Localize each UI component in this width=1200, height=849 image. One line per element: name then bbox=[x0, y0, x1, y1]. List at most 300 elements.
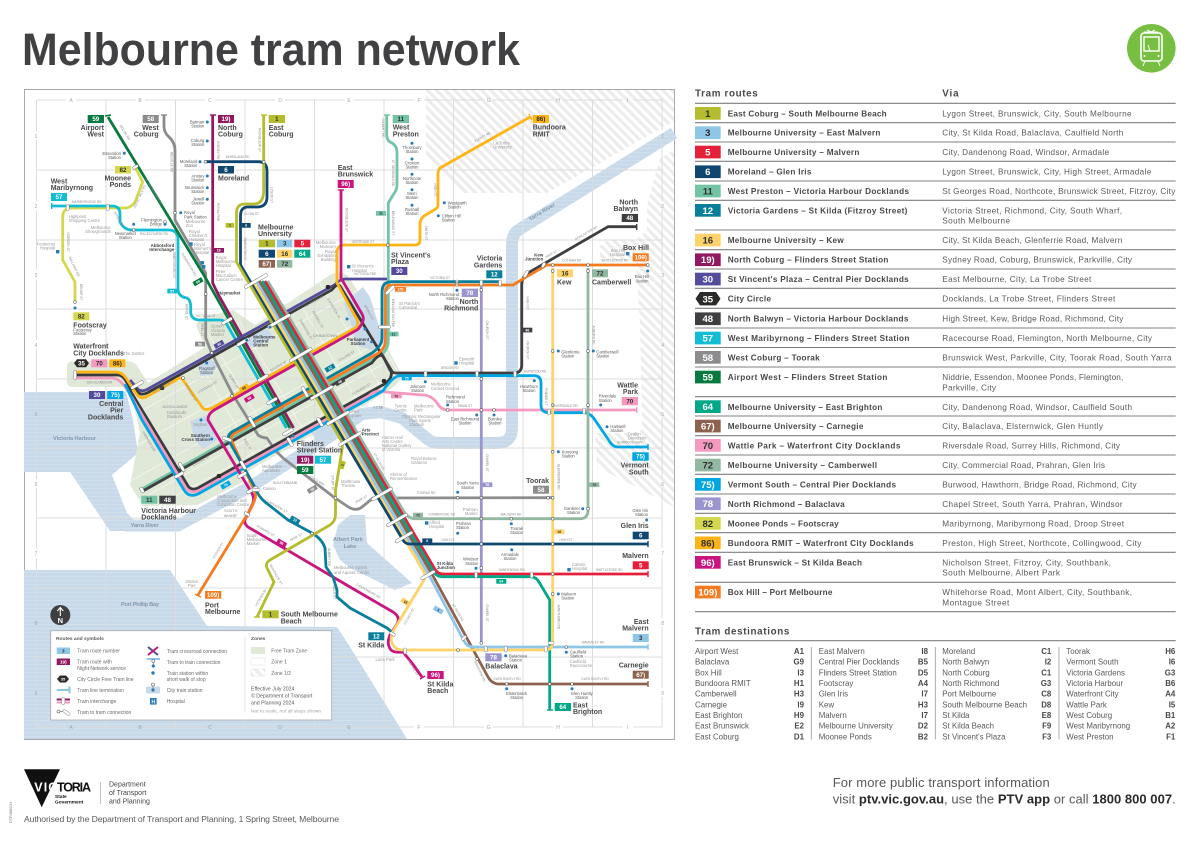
panel: tram destinations bbox=[695, 626, 1176, 741]
water labels bbox=[53, 202, 557, 608]
street names: ST KILDA RD bbox=[451, 603, 465, 623]
destination label: Malvern: Malvern bbox=[622, 553, 649, 560]
station names: Brunswick bbox=[185, 185, 205, 190]
destination label: Camberwell: 72 bbox=[597, 270, 604, 278]
station names: Station bbox=[191, 189, 205, 194]
row: route 72: City, Commercial Road, Prahran, Glen Iris bbox=[942, 461, 1105, 470]
grid references: B bbox=[138, 725, 142, 731]
grid references: H bbox=[556, 725, 560, 731]
street names: CHAPEL ST bbox=[485, 454, 489, 472]
destination label: St Vincent's Plaza: 30 bbox=[396, 268, 403, 275]
street names: BOURKE ST bbox=[270, 360, 288, 372]
panel: tram routes table bbox=[695, 89, 1176, 612]
landmarks: MacCallum bbox=[216, 273, 237, 278]
grid references: 2 bbox=[661, 204, 664, 210]
destination label: St Vincent's Plaza: Plaza bbox=[391, 259, 409, 266]
destinations column 1: Box Hill bbox=[695, 668, 722, 677]
street names: HIGH ST bbox=[526, 297, 530, 310]
destinations column 4: G3 bbox=[1165, 668, 1176, 677]
small inline route markers: 48 bbox=[525, 328, 529, 332]
row: route 1: 1 bbox=[705, 109, 711, 120]
landmarks: Market bbox=[465, 511, 479, 516]
station names: Anstey bbox=[191, 174, 205, 178]
row: route 57: Racecourse Road, Flemington, North Melbourne, City bbox=[942, 334, 1153, 343]
landmarks: Box Hill bbox=[611, 248, 625, 253]
small inline route markers: 86 bbox=[241, 386, 247, 391]
street names: ACLAND ST bbox=[407, 659, 419, 676]
station names: Westgarth bbox=[448, 200, 467, 206]
row: route 11 bbox=[695, 185, 1176, 198]
destination label: East Brighton bbox=[555, 702, 602, 716]
street names: LA TROBE ST bbox=[153, 380, 172, 394]
street names: ELIZABETH ST bbox=[249, 349, 263, 370]
street names: PARK ST bbox=[289, 532, 303, 542]
destinations column 4: B6 bbox=[1165, 679, 1176, 688]
route 72 bbox=[268, 268, 588, 519]
row: route 48: 48 bbox=[702, 314, 714, 325]
footer: authorisation note: Authorised by the Department of Transport and Planning, 1 Spring Street, Melbourne bbox=[24, 814, 339, 824]
row: route 58 bbox=[695, 351, 1172, 364]
street names: HIGH ST bbox=[442, 538, 455, 542]
destination label: Melbourne University: 64 bbox=[299, 251, 306, 258]
legend: city train station: City train station bbox=[167, 688, 203, 694]
row: route 30 bbox=[695, 273, 1092, 286]
station names: Royal bbox=[184, 210, 195, 215]
landmarks: Melbourne bbox=[262, 464, 282, 469]
route 58 bbox=[164, 115, 553, 509]
grid references: 8 bbox=[35, 621, 38, 627]
street names: BRIDGE RD bbox=[441, 366, 460, 370]
logo: Victoria State Government: Government bbox=[55, 800, 84, 806]
destinations column 3: I2 bbox=[1045, 658, 1052, 667]
station names: Hartwell bbox=[610, 424, 625, 429]
destination label: Carnegie bbox=[619, 663, 649, 679]
landmarks: Docklands bbox=[167, 410, 186, 415]
row: route 58: Brunswick West, Parkville, City, Toorak Road, South Yarra bbox=[942, 354, 1172, 362]
landmarks: Park bbox=[414, 408, 424, 412]
street names: PARK ST bbox=[355, 494, 368, 504]
small inline route markers: 96 bbox=[279, 541, 284, 546]
route 11 bbox=[142, 115, 397, 489]
row: route 6: 6 bbox=[705, 167, 710, 178]
grid references: G bbox=[487, 98, 491, 104]
destination label: North Coburg bbox=[218, 115, 243, 139]
destinations column 4: West Coburg bbox=[1066, 711, 1112, 720]
row: route 75 bbox=[695, 478, 1138, 491]
landmarks: Malthouse bbox=[341, 479, 361, 484]
destination label: Camberwell bbox=[592, 269, 631, 286]
destination label: West Preston bbox=[393, 115, 419, 138]
legend: train station within walk bbox=[151, 671, 208, 683]
destination label: West Coburg: West bbox=[142, 125, 159, 132]
row: route 82: Moonee Ponds – Footscray bbox=[728, 520, 839, 528]
route 82 bbox=[63, 167, 143, 302]
landmarks: Hospital bbox=[194, 250, 209, 255]
small inline route markers: 96 bbox=[247, 396, 252, 401]
station names: Station bbox=[575, 695, 589, 700]
small inline route markers: 1 bbox=[229, 224, 231, 228]
row: route 109: Whitehorse Road, Mont Albert, City, Southbank, bbox=[942, 588, 1132, 597]
station names: Station bbox=[561, 354, 575, 358]
route 75 bbox=[125, 376, 648, 495]
landmarks: Luna Park bbox=[375, 657, 395, 662]
grid references: H bbox=[556, 98, 560, 104]
station names: Station bbox=[108, 155, 122, 160]
street names: MONTAGUE ST bbox=[268, 563, 283, 586]
row: route 19 bbox=[695, 253, 1133, 266]
destination label: Central Pier Docklands: 75) bbox=[111, 392, 120, 399]
landmarks: University bbox=[628, 436, 647, 440]
row: route 59 bbox=[695, 371, 1123, 392]
destination label: East Brighton: Brighton bbox=[573, 709, 602, 716]
street names: SPRING ST bbox=[363, 304, 375, 321]
grid references: 5 bbox=[661, 412, 664, 418]
destination label: Kew bbox=[557, 269, 573, 286]
destination label: Malvern bbox=[622, 553, 649, 570]
landmarks: Pier bbox=[188, 583, 196, 588]
destination label: Wattle Park: 70 bbox=[626, 398, 634, 405]
row: route 109: 109) bbox=[698, 588, 717, 598]
destination label: Melbourne University: 67) bbox=[262, 261, 271, 268]
row: route 67: Melbourne University – Carnegie bbox=[728, 422, 864, 431]
legend: night network route: 19) bbox=[60, 660, 67, 664]
grid lines bbox=[36, 100, 662, 727]
landmarks: Melbourne bbox=[414, 404, 434, 408]
row: route 1: East Coburg – South Melbourne Beach bbox=[728, 109, 887, 118]
legend: train station within walk: Train station within bbox=[167, 671, 208, 677]
destinations column 1: Camberwell bbox=[695, 690, 737, 699]
station names: Station bbox=[405, 180, 419, 185]
footer: contact information bbox=[833, 775, 1176, 806]
station names: Melbourne bbox=[253, 334, 276, 340]
destination label: Victoria Harbour Docklands: Docklands bbox=[141, 515, 177, 522]
landmarks: Cathedral bbox=[399, 305, 417, 310]
destinations column 3: F3 bbox=[1042, 732, 1052, 741]
destination label: Kew: 16 bbox=[562, 270, 569, 278]
destinations column 1: East Brighton bbox=[695, 711, 742, 720]
row: route 12: 12 bbox=[702, 206, 713, 217]
small inline route markers: 1 bbox=[340, 463, 345, 467]
destination label: St Kilda bbox=[358, 632, 384, 649]
street names: CHURCH ST bbox=[526, 341, 530, 359]
station names: Station bbox=[405, 211, 419, 216]
small inline route markers bbox=[167, 211, 599, 615]
station names: Station bbox=[405, 149, 419, 154]
destination label: West Coburg bbox=[134, 115, 159, 139]
station names: Balaclava bbox=[509, 654, 528, 658]
destination label: Central Pier Docklands: Docklands bbox=[88, 414, 123, 421]
landmarks: SkyBus bbox=[193, 422, 207, 427]
landmarks: Stadium bbox=[167, 414, 183, 419]
destination label: Victoria Harbour Docklands: 11 bbox=[146, 497, 153, 504]
logo: Victoria State Government: Department bbox=[109, 782, 146, 789]
destination label: East Coburg bbox=[269, 115, 294, 139]
destination label: West Preston: West bbox=[393, 125, 410, 132]
street names: GORDON ST bbox=[66, 232, 70, 252]
street names: SMITH ST bbox=[424, 226, 428, 240]
destination label: East Brunswick: East bbox=[338, 165, 353, 172]
row: route 6 bbox=[695, 165, 1152, 178]
landmarks: Melbourne bbox=[91, 225, 111, 230]
small inline route markers: 109 bbox=[398, 288, 404, 292]
station names: Station bbox=[191, 142, 205, 147]
destination label: Box Hill: Box Hill bbox=[623, 245, 649, 252]
row: route 96: 96) bbox=[701, 558, 715, 569]
street names: BURWOOD HWY bbox=[617, 441, 644, 445]
destination label: Moonee Ponds: Moonee bbox=[105, 175, 131, 182]
destinations column 2: Footscray bbox=[819, 679, 853, 688]
landmarks: La Trobe bbox=[493, 140, 511, 146]
landmarks: Hospital bbox=[352, 268, 367, 273]
destination label: East Malvern bbox=[622, 619, 649, 642]
panel: legend bbox=[51, 631, 332, 720]
city street grid bbox=[131, 280, 402, 506]
landmarks: Melbourne bbox=[216, 259, 236, 264]
grid references: 3 bbox=[661, 273, 664, 279]
grid references: E bbox=[347, 98, 351, 104]
station names: Batman bbox=[190, 120, 205, 124]
destinations column 4: F1 bbox=[1166, 732, 1176, 741]
destination label: Waterfront City Docklands: 86) bbox=[113, 360, 122, 368]
destination label: St Kilda: St Kilda bbox=[358, 642, 384, 649]
route 30 bbox=[130, 279, 387, 391]
destination label: St Vincent's Plaza bbox=[391, 252, 431, 275]
row: route 35: City Circle bbox=[728, 295, 771, 304]
heading: via: Via bbox=[942, 89, 959, 100]
destination label: West Maribyrnong: Maribyrnong bbox=[51, 185, 93, 192]
destination label: Waterfront City Docklands: Waterfront bbox=[73, 344, 109, 351]
destination label: Waterfront City Docklands: 70 bbox=[96, 360, 103, 368]
interchange bars bbox=[66, 164, 585, 654]
destination label: Airport West: 59 bbox=[92, 116, 100, 123]
street names: POWER ST bbox=[544, 388, 548, 405]
destination label: Carnegie: 67) bbox=[636, 672, 645, 679]
legend: tram to train connection: Tram to train connection bbox=[167, 660, 221, 666]
station names: Jolimont bbox=[410, 384, 426, 389]
destinations column 3 bbox=[942, 647, 1052, 741]
icon: north arrow bbox=[50, 605, 70, 625]
row: route 78: Chapel Street, South Yarra, Prahran, Windsor bbox=[942, 500, 1123, 509]
destination label: Airport West: Airport bbox=[81, 125, 105, 132]
destinations column 3: C1 bbox=[1041, 668, 1052, 677]
street names: GLENFERRIE RD bbox=[556, 464, 560, 490]
destinations column 3: G3 bbox=[1041, 679, 1052, 688]
street names: MELVILLE RD bbox=[170, 152, 174, 173]
destinations column 1: Airport West bbox=[695, 647, 739, 656]
small inline route markers: 19 bbox=[217, 249, 221, 253]
destinations column 2: Flinders Street Station bbox=[819, 668, 897, 677]
landmarks: Centre bbox=[394, 408, 407, 412]
destination label: Flinders Street Station bbox=[297, 441, 342, 474]
destinations column 2: B5 bbox=[918, 658, 929, 667]
destination label: Flinders Street Station: 19) bbox=[301, 457, 310, 464]
station names: Junction bbox=[437, 565, 455, 570]
destinations column 1: I9 bbox=[797, 700, 805, 709]
logo: Victoria State Government: of Transport bbox=[109, 790, 146, 797]
street names: VICTORIA PDE bbox=[354, 272, 376, 276]
street names: WHARF bbox=[224, 514, 238, 518]
destination label: North Balwyn bbox=[613, 199, 638, 222]
landmarks: Hospital bbox=[40, 246, 55, 250]
destination label: North Coburg: North bbox=[218, 125, 237, 132]
station names: Station bbox=[561, 596, 575, 600]
row: route 64: Melbourne University – East Brighton bbox=[728, 403, 882, 412]
destination label: East Brighton: East bbox=[573, 702, 588, 709]
grid references: D bbox=[278, 98, 282, 104]
street names: GLEN HUNTLY RD bbox=[493, 677, 521, 681]
logo: Victoria State Government: TORIA bbox=[57, 780, 91, 794]
street names bbox=[66, 118, 644, 683]
route 86 bbox=[75, 117, 530, 410]
street names: BURWOOD RD bbox=[524, 370, 547, 374]
row: route 48: High Street, Kew, Bridge Road, Richmond, City bbox=[942, 315, 1124, 324]
grid references: C bbox=[208, 98, 212, 104]
small inline route markers: 6 bbox=[426, 539, 428, 543]
destinations column 1 bbox=[695, 647, 805, 741]
grid references: F bbox=[417, 98, 421, 104]
destinations column 2: Moonee Ponds bbox=[819, 732, 872, 741]
row: route 70: Riversdale Road, Surrey Hills, Richmond, City bbox=[942, 442, 1121, 450]
street names: CHURCH ST bbox=[485, 321, 489, 339]
destinations column 2: Kew bbox=[819, 700, 834, 709]
landmarks: ACMI bbox=[373, 405, 383, 410]
station names: Station bbox=[411, 388, 425, 393]
row: route 57: West Maribyrnong – Flinders Street Station bbox=[728, 334, 909, 343]
street names: ASCOT VALE RD bbox=[133, 184, 147, 209]
row: route 5 bbox=[695, 146, 1109, 158]
grid references: 2 bbox=[35, 204, 38, 210]
row: route 70: Wattle Park – Waterfront City Docklands bbox=[728, 442, 901, 450]
station names: Station bbox=[405, 195, 419, 200]
row: route 78: North Richmond – Balaclava bbox=[728, 500, 845, 509]
legend: tram to tram connection bbox=[57, 709, 132, 716]
landmarks: Museum bbox=[320, 244, 336, 249]
destinations column 4: Victoria Gardens bbox=[1066, 668, 1125, 677]
landmarks: Epworth bbox=[459, 356, 475, 362]
station names: Station bbox=[446, 296, 460, 301]
title: Melbourne tram network bbox=[22, 24, 521, 75]
water labels: Victoria Harbour bbox=[53, 436, 97, 442]
landmarks: Deakin bbox=[628, 432, 641, 436]
destinations column 1: East Brunswick bbox=[695, 722, 749, 731]
street names: LONSDALE ST bbox=[197, 380, 218, 394]
landmarks: Shrine of bbox=[390, 472, 408, 477]
destination label: Wattle Park bbox=[617, 382, 638, 405]
street names: STURT ST bbox=[331, 475, 335, 491]
route 35 City Circle Flinders and Docklands bbox=[75, 371, 391, 489]
street names: ROYAL PDE bbox=[216, 203, 220, 221]
grid references: 7 bbox=[661, 551, 664, 557]
station names: Station bbox=[465, 561, 479, 566]
destination label: North Richmond: North bbox=[460, 299, 478, 306]
street names: RIVERSDALE RD bbox=[552, 404, 579, 408]
station names: Burnley bbox=[488, 416, 503, 422]
station names: Station bbox=[191, 124, 205, 128]
station names: Station bbox=[351, 341, 366, 346]
station names: Precinct bbox=[362, 432, 380, 436]
legend: tram route number: 3 bbox=[62, 648, 65, 654]
small inline route markers: 78 bbox=[485, 483, 489, 487]
destination label: Vermont South: South bbox=[629, 469, 649, 476]
legend: hospital: H bbox=[151, 699, 155, 705]
destination label: St Kilda Beach bbox=[427, 671, 453, 695]
logo: Victoria State Government: and Planning bbox=[109, 798, 150, 805]
destination label: Glen Iris: 6 bbox=[639, 533, 643, 540]
destination label: Flinders Street Station: 57 bbox=[320, 457, 327, 464]
free tram zone bbox=[67, 273, 403, 506]
row: route 5: 5 bbox=[705, 148, 711, 158]
destinations column 4: H6 bbox=[1165, 647, 1176, 656]
station names: Abbotsford bbox=[151, 243, 175, 248]
destination label: Bundoora RMIT bbox=[533, 115, 566, 138]
station names: Gardiner bbox=[564, 506, 581, 511]
destinations column 3: Moreland bbox=[942, 647, 975, 656]
destinations column 3: F9 bbox=[1042, 722, 1052, 731]
legend: city circle: 35 bbox=[61, 676, 66, 681]
row: route 72: 72 bbox=[702, 460, 713, 472]
station names: Junction bbox=[525, 256, 544, 262]
destinations column 4: Waterfront City bbox=[1066, 690, 1119, 699]
street names: MARIBYRNONG RD bbox=[72, 200, 102, 204]
grid references: 6 bbox=[35, 482, 38, 488]
destinations column 3: North Balwyn bbox=[942, 658, 989, 667]
grid references: G bbox=[487, 725, 491, 731]
destination label: Footscray: 82 bbox=[78, 314, 85, 320]
station names: Station bbox=[570, 654, 584, 658]
destination label: St Kilda: 12 bbox=[373, 634, 380, 640]
destinations column 4: Vermont South bbox=[1066, 658, 1119, 667]
street names: GILBERT RD bbox=[381, 118, 385, 138]
row: route 67 bbox=[695, 420, 1104, 432]
route 78 bbox=[480, 283, 483, 643]
street names: COTHAM RD bbox=[562, 259, 582, 263]
street names: SOUTH bbox=[224, 509, 238, 513]
destinations column 4: A2 bbox=[1165, 722, 1176, 731]
destination label: North Coburg: Coburg bbox=[218, 132, 243, 139]
icon: PTV tram roundel bbox=[1127, 24, 1176, 73]
row: route 1 bbox=[695, 107, 1132, 120]
destination label: Vermont South: Vermont bbox=[621, 463, 649, 470]
row: route 109 bbox=[695, 586, 1132, 607]
station names: South Yarra bbox=[457, 481, 479, 486]
destination label: South Melbourne Beach bbox=[262, 610, 338, 625]
destination label: Glen Iris bbox=[621, 523, 649, 540]
logo: Victoria State Government bbox=[24, 769, 150, 807]
small inline route markers: 64 bbox=[499, 580, 503, 584]
tram stop connections bbox=[74, 160, 649, 685]
landmarks: Alfred bbox=[429, 520, 441, 525]
small inline route markers: 58 bbox=[310, 487, 315, 492]
destination label: St Kilda Beach: 96) bbox=[431, 672, 440, 679]
destinations column 3: South Melbourne Beach bbox=[942, 700, 1027, 709]
street names: VICTORIA ST bbox=[196, 314, 216, 318]
landmarks: Arts Centre bbox=[382, 439, 404, 444]
destination label: Moonee Ponds: Ponds bbox=[110, 182, 131, 189]
small inline route markers: 6 bbox=[245, 224, 247, 228]
landmarks: Children's bbox=[189, 233, 208, 238]
landmarks: Hospital bbox=[610, 252, 625, 257]
legend: zones: Free Tram Zone bbox=[271, 649, 307, 655]
row: route 86: 86) bbox=[701, 538, 715, 549]
landmarks: Highpoint bbox=[69, 214, 87, 219]
row: route 109: Montague Street bbox=[942, 598, 1010, 607]
destination label: East Brunswick: Brunswick bbox=[338, 172, 373, 179]
landmarks: Market bbox=[211, 332, 225, 337]
landmarks: Building bbox=[321, 257, 336, 262]
destination label: Bundoora RMIT: Bundoora bbox=[533, 125, 566, 132]
small inline route markers: 12 bbox=[292, 518, 298, 523]
destination label: Wattle Park: Park bbox=[623, 389, 638, 396]
